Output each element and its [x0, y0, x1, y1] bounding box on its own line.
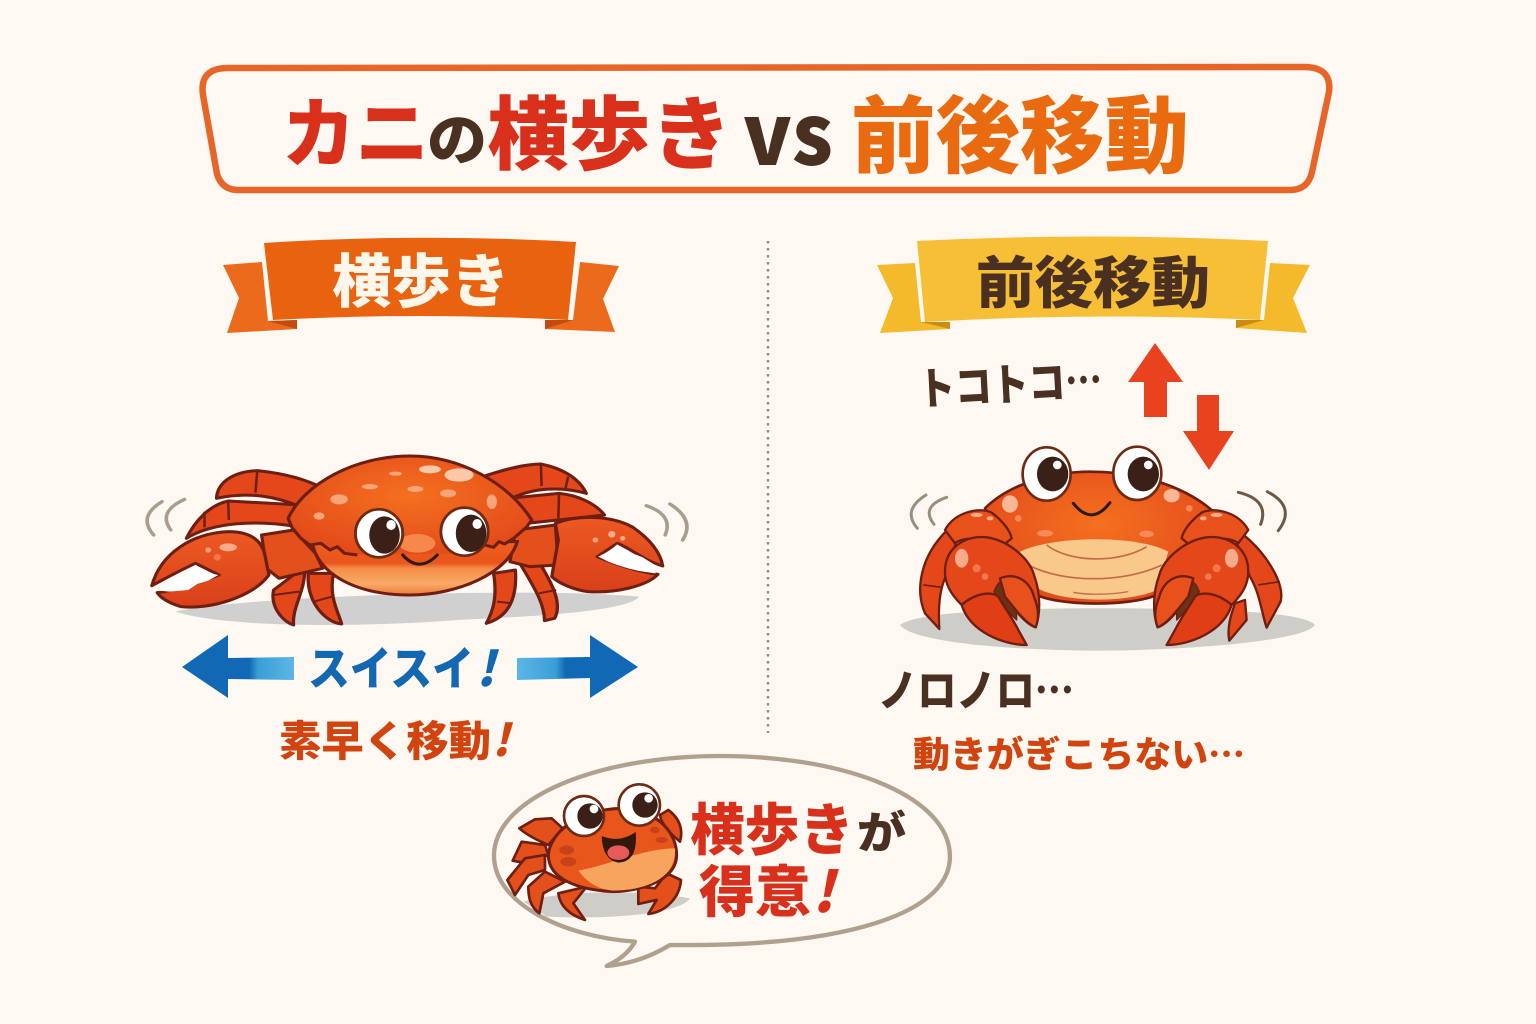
double arrow: sideways movement: [182, 630, 638, 700]
caption: 動きがぎこちない: 動きがぎこちない…: [913, 726, 1245, 778]
speech bubble: [494, 756, 950, 966]
ground shadow: [175, 593, 639, 625]
motion lines right: [1238, 492, 1285, 531]
ground shadow: [900, 608, 1315, 651]
front-facing crab illustration: [900, 447, 1315, 651]
bubble text: 横歩き: 横歩き: [690, 786, 854, 867]
mouth: [1073, 503, 1110, 515]
body spots: [1002, 489, 1193, 537]
down arrow: [1183, 395, 1234, 470]
shell highlights: [314, 465, 497, 520]
title text: 横歩き: 横歩き: [487, 71, 732, 187]
exclamation mark: !: [476, 630, 500, 700]
right arrow: [517, 635, 638, 698]
banner label: 横歩き: [332, 235, 510, 319]
walking legs: [273, 565, 557, 625]
banner: 横歩き: [223, 235, 619, 333]
bubble text: 得意: 得意: [699, 848, 811, 929]
right claw: [552, 517, 663, 592]
caption: 素早く移動: [279, 705, 514, 769]
banner label: 前後移動: [976, 239, 1210, 320]
スイスイ label: スイスイ: [308, 633, 474, 699]
belly plate: [1018, 539, 1168, 600]
label: トコトコ: トコトコ…: [916, 344, 1103, 418]
small happy crab: [507, 784, 690, 920]
outer left leg: [920, 530, 957, 629]
title text: カニ: カニ: [282, 73, 429, 183]
eyes: [1023, 447, 1161, 501]
outer right leg: [1229, 533, 1281, 641]
bubble outline: [494, 756, 950, 966]
up arrow: [1128, 343, 1183, 417]
crab lower body: [312, 540, 517, 595]
right arm: [510, 525, 558, 567]
left claw: [152, 532, 269, 607]
banner: 前後移動: [877, 236, 1310, 333]
sideways crab illustration: [147, 456, 687, 625]
right claw: [1154, 510, 1248, 645]
crab mouth: [403, 555, 437, 564]
back legs: [186, 464, 604, 538]
title frame: [203, 67, 1329, 190]
bubble text: が: が: [857, 797, 906, 861]
title text: 前後移動: 前後移動: [851, 70, 1189, 191]
title: [203, 67, 1329, 191]
title text: の: の: [427, 96, 487, 177]
left claw: [945, 510, 1039, 645]
left arrow: [182, 635, 294, 698]
shell and body: [985, 472, 1212, 604]
up and down arrows: [1128, 343, 1234, 470]
caption words: 素早く移動: [279, 708, 491, 769]
exclamation mark: !: [812, 848, 839, 929]
crab shell: [288, 456, 532, 555]
center divider: [767, 241, 769, 733]
exclamation mark: !: [492, 705, 514, 769]
motion lines left: [911, 495, 947, 528]
crab eyes: [355, 508, 488, 557]
label: ノロノロ: ノロノロ…: [878, 655, 1074, 719]
motion lines right: [646, 504, 687, 540]
left arm: [262, 530, 323, 578]
motion lines left: [147, 499, 185, 535]
title text: vs: vs: [743, 69, 833, 190]
